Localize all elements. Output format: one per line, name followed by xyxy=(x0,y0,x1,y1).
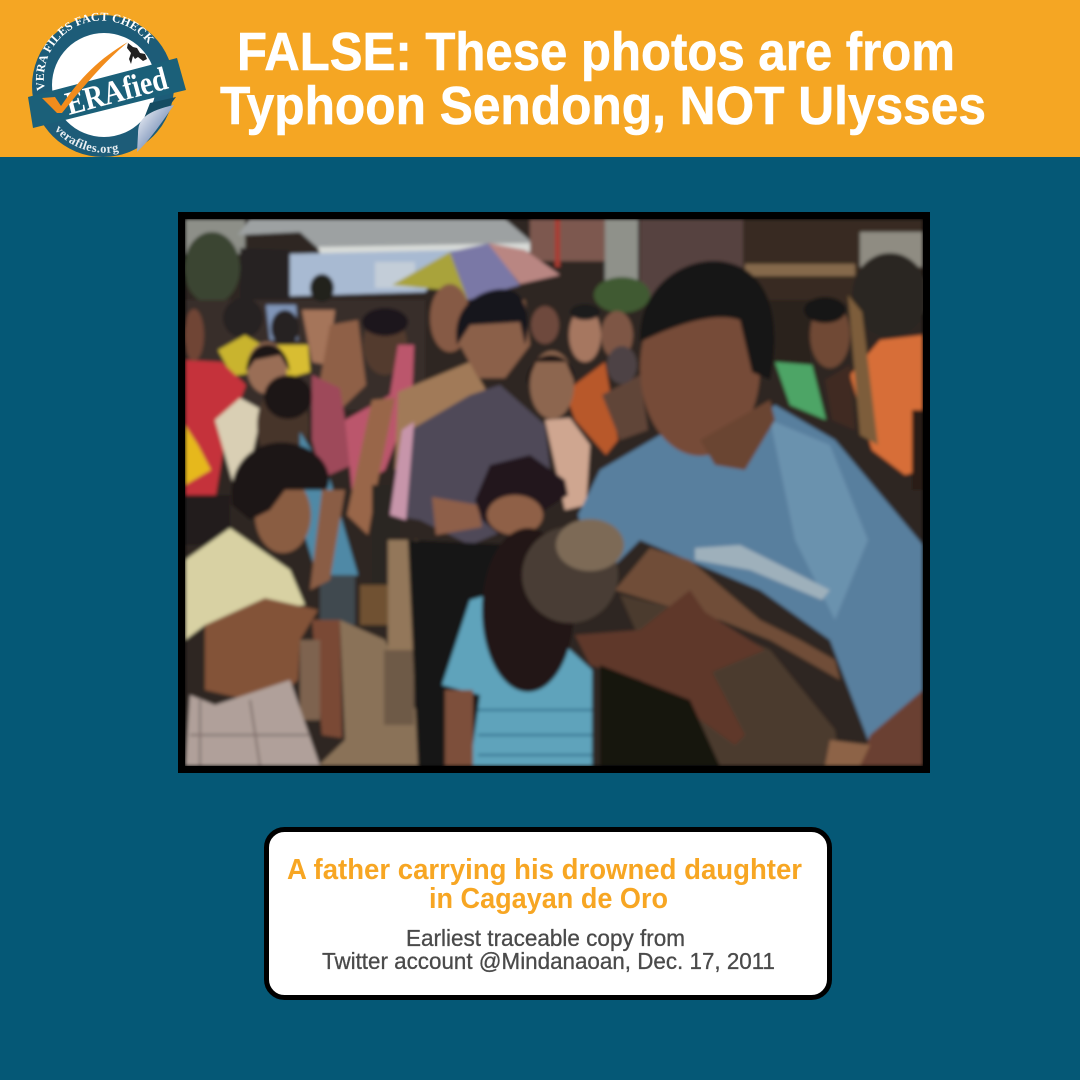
logo map glyph xyxy=(127,43,147,64)
shirt lettering trace xyxy=(695,545,830,600)
women behind xyxy=(531,306,559,344)
left boy xyxy=(255,477,311,553)
title line 1: FALSE: These photos are from xyxy=(237,22,955,82)
left woman and red shirt xyxy=(185,360,246,505)
logo ring xyxy=(32,15,174,157)
header band xyxy=(0,0,1080,157)
logo banner xyxy=(28,58,186,128)
title xyxy=(220,22,986,136)
source line 2: Twitter account @Mindanaoan, Dec. 17, 2011 xyxy=(322,948,775,974)
bald man xyxy=(430,284,470,352)
logo ring text bottom: verafiles.org xyxy=(56,126,119,154)
photo frame xyxy=(178,212,930,773)
striped shirt xyxy=(442,590,592,766)
umbrella xyxy=(392,252,468,300)
logo check mark xyxy=(42,42,128,113)
photo: impressionistic flood scene of crowd and father carrying child xyxy=(184,219,928,766)
father head xyxy=(638,314,762,458)
father shirt xyxy=(578,405,923,745)
caption box xyxy=(266,830,830,998)
young child xyxy=(475,455,568,535)
central teen xyxy=(458,300,530,378)
father arm and hand xyxy=(575,590,765,745)
carried child xyxy=(482,528,574,692)
title line 2: Typhoon Sendong, NOT Ulysses xyxy=(220,76,986,136)
source line 1: Earliest traceable copy from xyxy=(406,925,685,951)
logo white centre xyxy=(52,33,156,137)
back crowd bodies xyxy=(185,300,425,410)
caption heading line 2: in Cagayan de Oro xyxy=(429,883,668,915)
mud ground xyxy=(318,620,420,766)
sky and buildings xyxy=(185,219,245,254)
orange and green shirts right xyxy=(775,362,826,420)
caption heading line 1: A father carrying his drowned daughter xyxy=(287,854,802,886)
logo banner fold xyxy=(138,97,176,134)
logo ring text top: VERA FILES FACT CHECK xyxy=(36,12,154,91)
caption panel xyxy=(266,830,830,998)
logo page peel xyxy=(137,105,174,152)
logo banner text: ERAfied xyxy=(62,61,172,123)
logo: VERAfied badge xyxy=(28,12,186,157)
